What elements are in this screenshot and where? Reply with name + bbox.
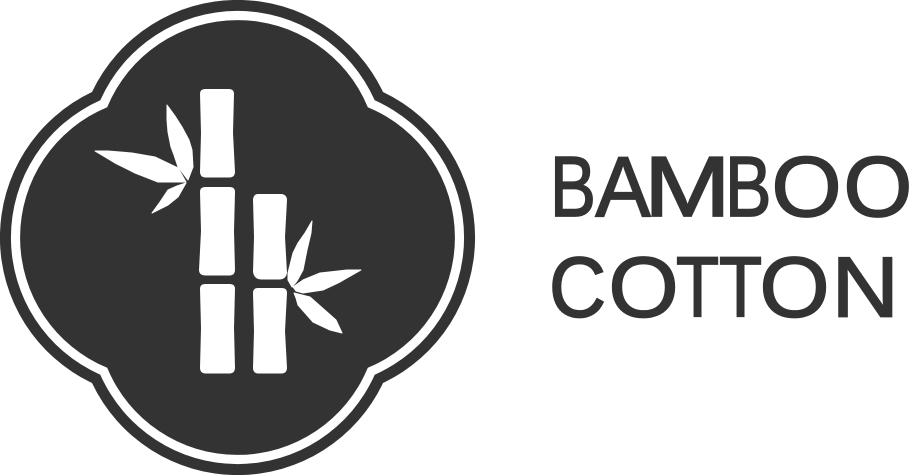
wordmark [549,139,911,335]
word: BAMBOO: O [772,140,842,235]
icon: bamboo leaves right [288,221,361,333]
word: COTTON: O [608,240,679,335]
word: BAMBOO [550,139,911,235]
word: COTTON: O [760,240,830,335]
word: BAMBOO: A [596,139,651,234]
icon: bamboo stalks [199,89,287,374]
word: COTTON: N [832,239,899,335]
word: COTTON [549,239,899,335]
word: BAMBOO: B [550,140,596,235]
word: COTTON: T [719,239,762,335]
word: COTTON: T [676,239,719,335]
icon: bamboo leaves left [95,105,193,213]
logo emblem [0,0,475,475]
quatrefoil outer badge [0,0,475,475]
white inner ring [11,11,464,464]
quatrefoil inner field [20,20,455,455]
word: COTTON: C [549,241,606,335]
word: BAMBOO: B [725,141,771,235]
word: BAMBOO: O [844,141,911,235]
word: BAMBOO: M [644,140,731,235]
